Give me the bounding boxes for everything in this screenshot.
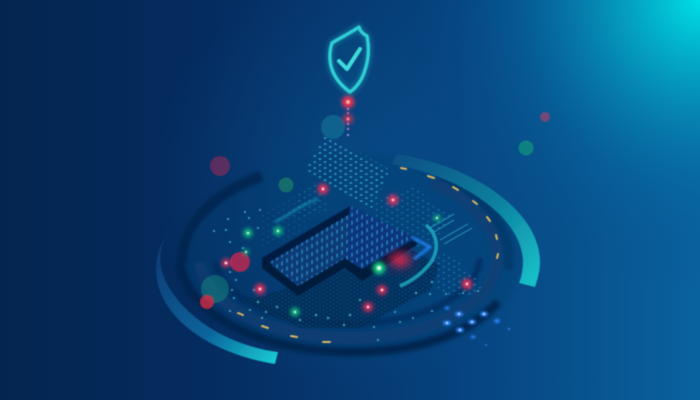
mesh floor: dark grid in front of block <box>240 250 440 328</box>
streak: cyan line on left plane <box>275 199 318 222</box>
blue dot cluster lower right <box>443 306 523 346</box>
arc: inner cyan curve at block tip <box>400 225 436 286</box>
dot grid: right circuit plane <box>368 186 452 250</box>
glowing nodes: red and green lights <box>222 184 472 316</box>
chevron: blue arrow at block tip <box>413 238 430 259</box>
road dashes: yellow markers along ring <box>238 168 498 342</box>
central block: raised isometric chip <box>262 206 418 296</box>
dot grid: tower plane behind the block <box>304 134 390 208</box>
main artwork softened <box>156 27 550 364</box>
beam: red dotted line below shield <box>342 96 354 136</box>
block left face: vertical data columns <box>270 214 350 286</box>
bokeh: translucent circles <box>200 112 550 309</box>
scattered data dots: left and bottom <box>213 209 479 341</box>
streaks: circuit lines on right <box>430 214 472 244</box>
block front dark bevel <box>262 237 418 296</box>
block right face: vertical data columns <box>345 206 416 269</box>
block top dark edge <box>262 206 356 266</box>
platform: dark concentric rings <box>176 153 522 358</box>
icon: shield with check mark <box>330 27 368 92</box>
arc: outer right cyan segment <box>392 154 540 287</box>
dot grid: left upper plane <box>258 184 328 250</box>
arc: outer left cyan segment <box>156 232 278 364</box>
dot grid: right lower plane <box>430 252 486 296</box>
